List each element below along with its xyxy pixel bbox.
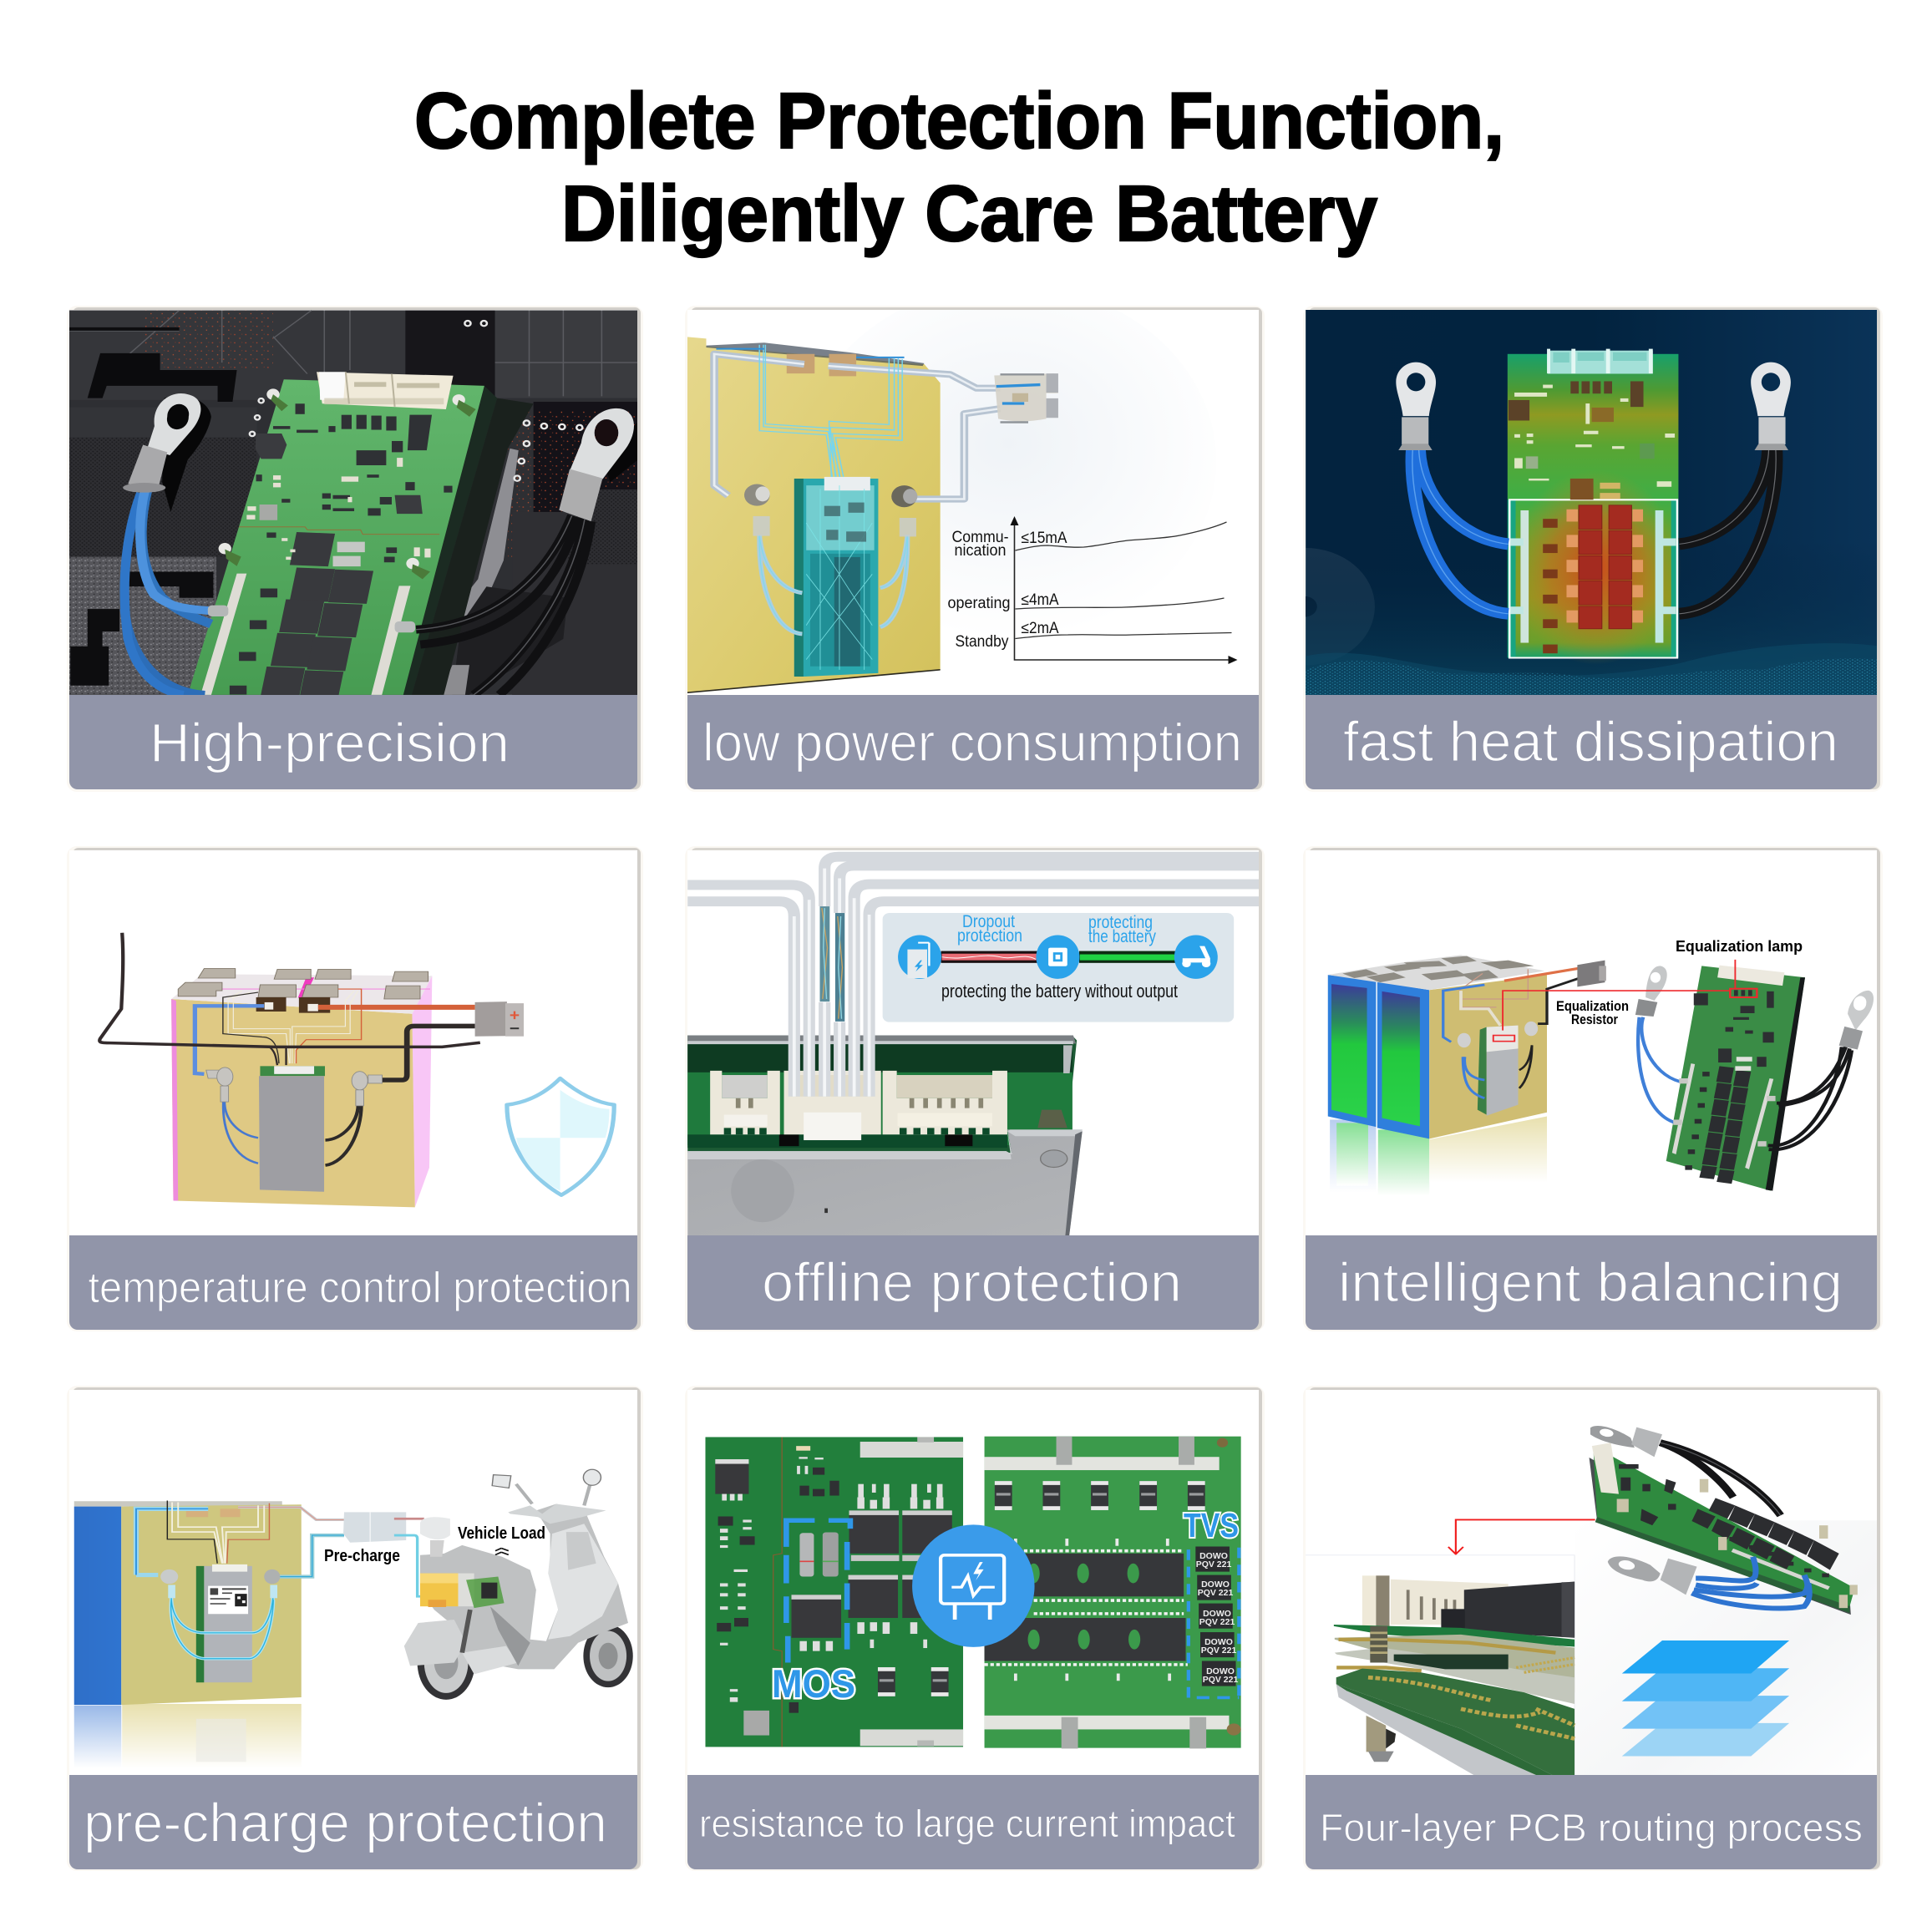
caption: temperature control protection: [69, 1235, 637, 1330]
callout: dropout protection flow: protecting: [1088, 913, 1153, 932]
caption: intelligent balancing: [1306, 1235, 1877, 1330]
title: [414, 77, 1504, 258]
title: Diligently Care Battery: [561, 170, 1377, 258]
panel: offline protection: [685, 846, 1265, 1331]
panel: pre-charge protection: [67, 1386, 643, 1871]
panel: fast heat dissipation: [1303, 306, 1883, 792]
callout: dropout protection flow: Dropout: [962, 912, 1015, 931]
right close-up: [985, 1437, 1241, 1748]
shield: [507, 1078, 614, 1195]
image: connector close-up with wires: [687, 857, 1259, 1235]
red leaders: [1493, 960, 1757, 1042]
image: battery pack and balancing board with red leader lines: [1328, 955, 1874, 1196]
chart: current curves for communication, operating and standby: ≤2mA: [1021, 620, 1059, 637]
board: [1508, 354, 1678, 658]
label: MOS: MOS: [772, 1661, 855, 1706]
TVS chip markings: PQV 221: [1201, 1645, 1236, 1656]
center badge: [912, 1524, 1035, 1647]
caption: pre-charge protection: [69, 1775, 637, 1869]
image: MOS and TVS board close-ups: [705, 1437, 1241, 1748]
right board: [1666, 966, 1805, 1191]
TVS chip markings: DOWO: [1199, 1551, 1228, 1561]
panel: temperature control protection: [67, 846, 643, 1331]
caption: temperature control protection: temperature control protection: [89, 1264, 631, 1312]
chart: current curves for communication, operating and standby: ≤15mA: [1021, 530, 1067, 547]
caption: pre-charge protection: pre-charge protection: [84, 1792, 607, 1853]
TVS chip markings: [1196, 1551, 1238, 1685]
chart: current curves for communication, operating and standby: ≤4mA: [1021, 591, 1059, 609]
chart: current curves for communication, operating and standby: [947, 516, 1238, 664]
TVS chip markings: PQV 221: [1196, 1559, 1231, 1569]
TVS chip markings: DOWO: [1206, 1666, 1235, 1676]
callout: dropout protection flow: [883, 912, 1234, 1022]
connector: [317, 372, 454, 409]
caption: offline protection: offline protection: [762, 1251, 1182, 1313]
title: Complete Protection Function,: [414, 77, 1504, 165]
image: battery, pre-charge module and scooter: [74, 1469, 633, 1768]
image: battery with BMS, sensor wire and shield: [99, 933, 614, 1207]
caption: fast heat dissipation: [1306, 695, 1877, 789]
caption: low power consumption: low power consumption: [702, 712, 1242, 773]
caption: resistance to large current impact: [687, 1775, 1259, 1869]
label: Vehicle Load: Vehicle Load: [458, 1524, 545, 1543]
sensor wire: [99, 933, 480, 1047]
caption: intelligent balancing: intelligent balancing: [1338, 1251, 1843, 1313]
TVS chip markings: PQV 221: [1203, 1675, 1238, 1685]
label: Equalization lamp: Equalization lamp: [1676, 938, 1803, 955]
chart: current curves for communication, operating and standby: Commu-: [952, 529, 1009, 546]
cross-section: [1303, 1555, 1575, 1777]
label: Equalization Resistor: Resistor: [1571, 1012, 1618, 1027]
TVS chip markings: DOWO: [1204, 1637, 1233, 1647]
panel: intelligent balancing: [1303, 846, 1883, 1331]
BMS: [260, 1066, 325, 1076]
chart: current curves for communication, operating and standby: operating: [947, 595, 1011, 612]
scooter: [418, 1652, 474, 1700]
TVS chip markings: PQV 221: [1198, 1588, 1233, 1598]
TVS chip markings: DOWO: [1203, 1609, 1231, 1619]
caption: offline protection: [687, 1235, 1259, 1330]
caption: fast heat dissipation: fast heat dissipation: [1343, 710, 1838, 773]
caption: Four-layer PCB routing process: Four-layer PCB routing process: [1320, 1806, 1863, 1849]
plate: [687, 1129, 1083, 1235]
connectors: [710, 1071, 1007, 1134]
cables: [1412, 449, 1509, 614]
panel: resistance to large current impact: [685, 1386, 1265, 1871]
left close-up: [705, 1437, 963, 1747]
image: board, layer stack and PCB cross-section: [1303, 1426, 1879, 1778]
label: TVS: TVS: [1184, 1506, 1239, 1544]
chart: current curves for communication, operating and standby: nication: [954, 542, 1006, 560]
image: battery cell with transparent BMS and cables: [687, 337, 1121, 693]
panel: high-precision: [67, 306, 643, 792]
caption: low power consumption: [687, 695, 1259, 789]
layer stack: [1622, 1723, 1789, 1757]
pre-charge module: [343, 1512, 406, 1543]
callout: dropout protection flow: the battery: [1088, 927, 1156, 946]
label: Pre-charge: Pre-charge: [324, 1547, 400, 1565]
caption: High-precision: High-precision: [150, 712, 510, 773]
panel: low power consumption: [685, 284, 1265, 792]
TVS chip markings: PQV 221: [1199, 1617, 1235, 1627]
caption: resistance to large current impact: resistance to large current impact: [699, 1802, 1235, 1845]
lugs: [1396, 363, 1436, 416]
caption: High-precision: [69, 695, 637, 789]
caption: Four-layer PCB routing process: [1306, 1775, 1877, 1869]
red arrow: [1448, 1519, 1595, 1554]
chart: current curves for communication, operating and standby: Standby: [956, 633, 1009, 651]
panel: Four-layer PCB routing process: [1303, 1386, 1883, 1871]
image: thermal map of BMS on navy background: [1306, 310, 1877, 695]
label: Equalization Resistor: Equalization: [1556, 998, 1629, 1014]
TVS chip markings: DOWO: [1201, 1580, 1230, 1590]
callout: dropout protection flow: protecting the battery without output: [941, 981, 1178, 1001]
board: [1590, 1458, 1851, 1615]
callout: dropout protection flow: protection: [957, 926, 1022, 946]
label: Equalization Resistor: [1556, 998, 1629, 1027]
image: green BMS board with cables on dark circuit background: [69, 311, 638, 705]
